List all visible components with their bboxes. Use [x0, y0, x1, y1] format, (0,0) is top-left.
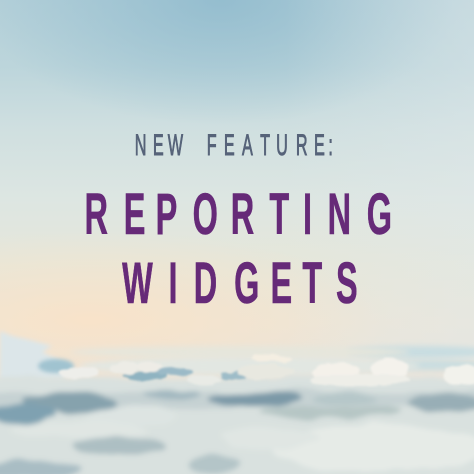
title: WIDGETS: WIDGETS [122, 250, 358, 315]
subtitle: NEW FEATURE:: NEWFEATURE: [135, 129, 333, 162]
title: REPORTING: REPORTING [85, 181, 392, 246]
cloud layer [0, 331, 474, 474]
